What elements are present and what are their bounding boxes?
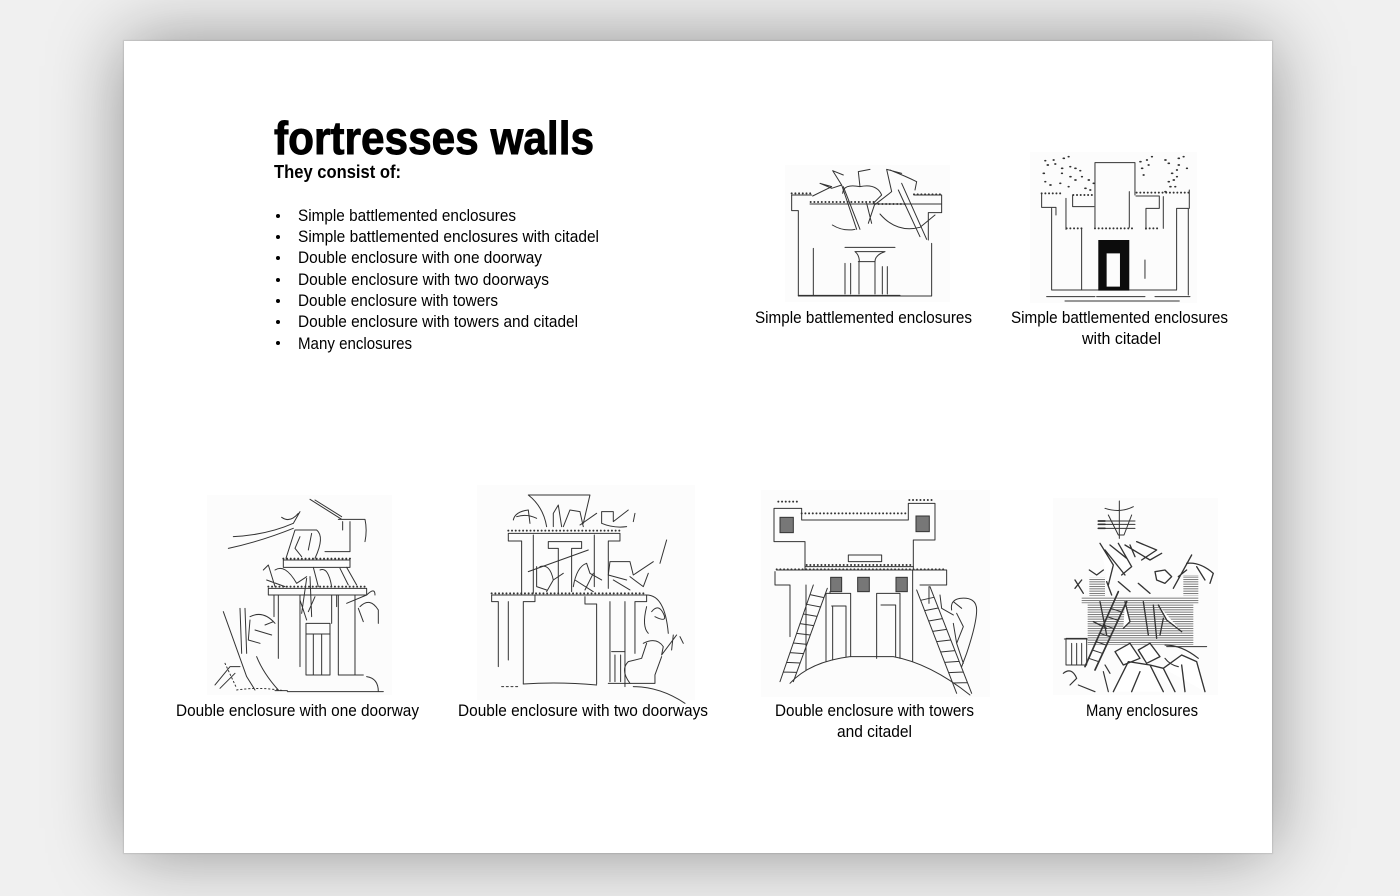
bullet list of enclosure types: Simple battlemented enclosures xyxy=(298,207,516,225)
caption: Simple battlemented enclosures xyxy=(755,309,972,327)
title: fortresses walls xyxy=(274,112,594,164)
panel: double enclosure with one doorway xyxy=(176,495,420,720)
caption: Double enclosure with one doorway xyxy=(176,702,420,720)
illustration: one doorway xyxy=(215,499,383,692)
illustration: two doorways xyxy=(492,495,685,703)
caption: Many enclosures xyxy=(1086,702,1198,720)
bullet list of enclosure types: Double enclosure with one doorway xyxy=(298,249,543,267)
bullet list of enclosure types xyxy=(276,207,599,353)
bullet list of enclosure types: Double enclosure with two doorways xyxy=(298,271,549,289)
panel: double enclosure with towers and citadel: and citadel xyxy=(837,723,912,741)
illustration: enclosure with citadel xyxy=(1042,157,1190,301)
illustration: many enclosures siege xyxy=(1063,501,1213,692)
panel: simple battlemented enclosures xyxy=(755,165,972,327)
subheading: They consist of: xyxy=(274,162,401,182)
illustration: towers and ladders xyxy=(774,500,977,695)
page card xyxy=(124,41,1272,853)
bullet list of enclosure types: Many enclosures xyxy=(298,335,412,353)
illustration: simple enclosure xyxy=(792,169,942,296)
caption: Double enclosure with two doorways xyxy=(458,702,708,720)
bullet list of enclosure types: Simple battlemented enclosures with citadel xyxy=(298,228,599,246)
panel: many enclosures xyxy=(1053,498,1218,720)
panel: simple battlemented enclosures with citadel xyxy=(1011,152,1228,348)
bullet list of enclosure types: Double enclosure with towers xyxy=(298,292,498,310)
caption: Simple battlemented enclosures xyxy=(1011,309,1228,327)
bullet list of enclosure types: Double enclosure with towers and citadel xyxy=(298,313,578,331)
panel: double enclosure with two doorways xyxy=(458,485,708,720)
panel: simple battlemented enclosures with citadel: with citadel xyxy=(1081,330,1161,348)
panel: double enclosure with towers and citadel xyxy=(761,490,990,741)
caption: Double enclosure with towers xyxy=(775,702,974,720)
